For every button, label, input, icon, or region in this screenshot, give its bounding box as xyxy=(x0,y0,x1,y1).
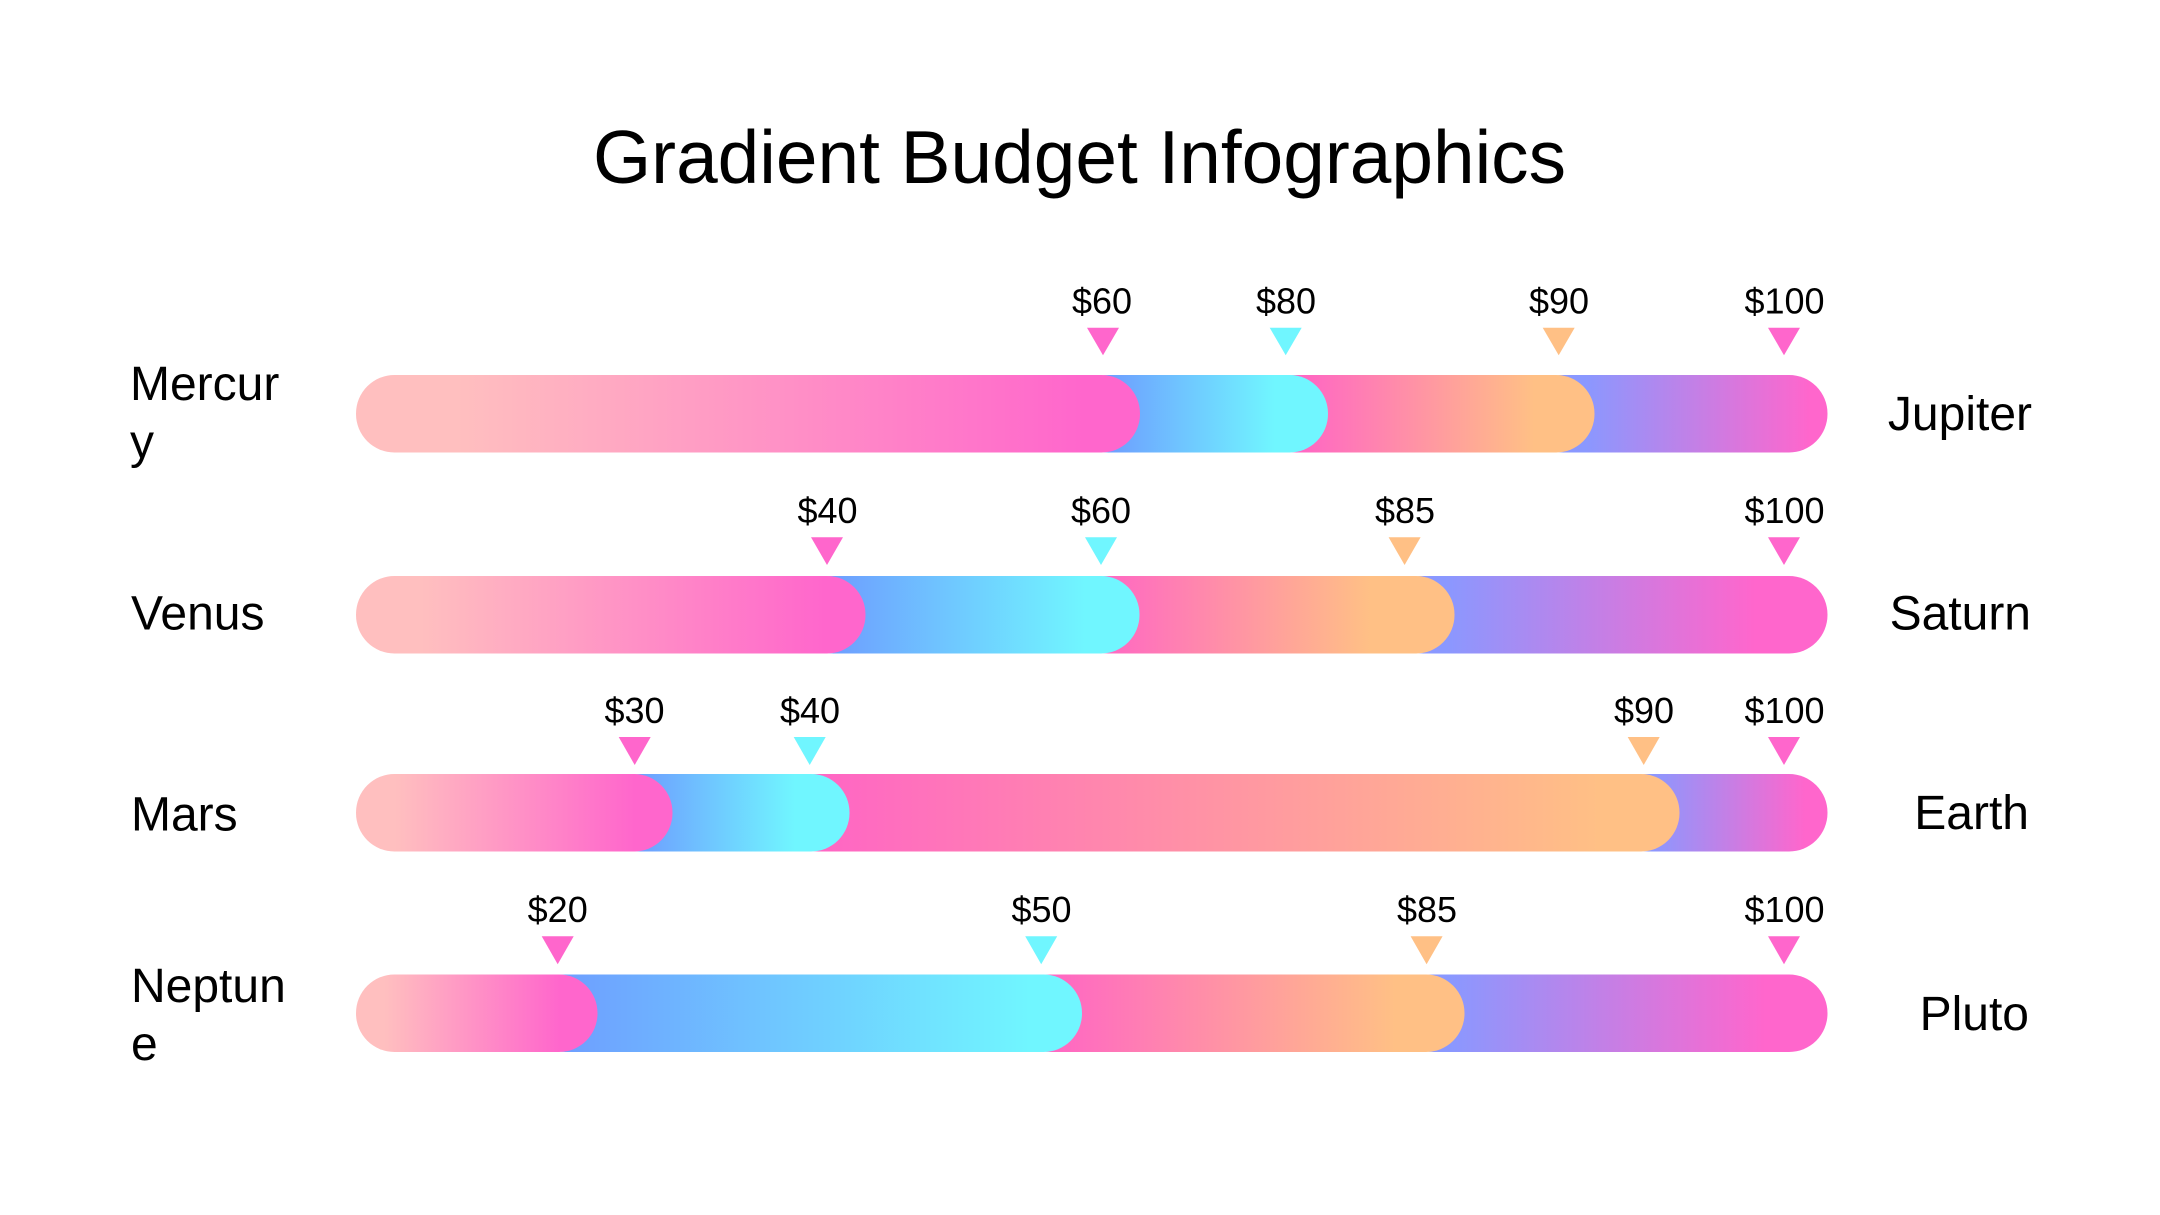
marker: $40 xyxy=(780,690,840,765)
marker: $100 xyxy=(1744,690,1825,765)
marker: $100: $100 xyxy=(1744,490,1825,531)
marker: $90 xyxy=(1614,690,1674,765)
marker: $100: $100 xyxy=(1744,280,1825,322)
marker: $60: $60 xyxy=(1072,280,1132,322)
marker: $60 xyxy=(1072,280,1132,355)
left label: Venus: Venus xyxy=(131,588,264,640)
marker: $85: $85 xyxy=(1397,889,1457,930)
left label: Mercury: y xyxy=(130,416,154,469)
left label: Neptune: Neptun xyxy=(131,960,286,1013)
marker: $40 xyxy=(797,490,858,565)
marker: $85 xyxy=(1375,490,1435,565)
right label: Jupiter: Jupiter xyxy=(1888,388,2032,441)
right label: Pluto: Pluto xyxy=(1920,988,2029,1041)
marker: $90 xyxy=(1529,280,1589,355)
budget bar: Neptune xyxy=(356,974,1828,1052)
marker: $40: $40 xyxy=(780,690,840,731)
marker: $100 xyxy=(1744,490,1825,565)
marker: $20 xyxy=(528,889,588,964)
marker: $100 xyxy=(1744,889,1825,964)
marker: $40: $40 xyxy=(797,490,858,531)
marker: $20: $20 xyxy=(528,889,588,930)
marker: $85: $85 xyxy=(1375,490,1435,531)
left label: Mars: Mars xyxy=(131,788,238,842)
budget bar: Mercury xyxy=(356,375,1828,452)
marker: $30: $30 xyxy=(604,690,665,731)
budget bar: Venus xyxy=(356,576,1828,654)
row: Venus / Saturn xyxy=(131,490,2031,654)
marker: $60 xyxy=(1071,490,1131,565)
marker: $50 xyxy=(1011,889,1072,964)
marker: $85 xyxy=(1397,889,1457,964)
title: Gradient Budget Infographics xyxy=(593,115,1566,199)
budget bar: Mars xyxy=(356,774,1828,852)
left label: Neptune: e xyxy=(131,1018,158,1071)
marker: $30 xyxy=(604,690,665,765)
marker: $60: $60 xyxy=(1071,490,1131,531)
marker: $100 xyxy=(1744,280,1825,355)
marker: $50: $50 xyxy=(1011,889,1072,930)
marker: $90: $90 xyxy=(1529,280,1589,322)
marker: $100: $100 xyxy=(1744,889,1825,930)
row: Mercury / Jupiter xyxy=(130,280,2032,469)
marker: $100: $100 xyxy=(1744,690,1825,731)
row: Neptune / Pluto xyxy=(131,889,2029,1071)
marker: $80: $80 xyxy=(1256,280,1316,322)
left label: Mercury: Mercur xyxy=(130,358,279,411)
marker: $80 xyxy=(1256,280,1316,355)
right label: Saturn: Saturn xyxy=(1890,588,2031,640)
right label: Earth: Earth xyxy=(1914,787,2029,840)
marker: $90: $90 xyxy=(1614,690,1674,731)
row: Mars / Earth xyxy=(131,690,2029,852)
